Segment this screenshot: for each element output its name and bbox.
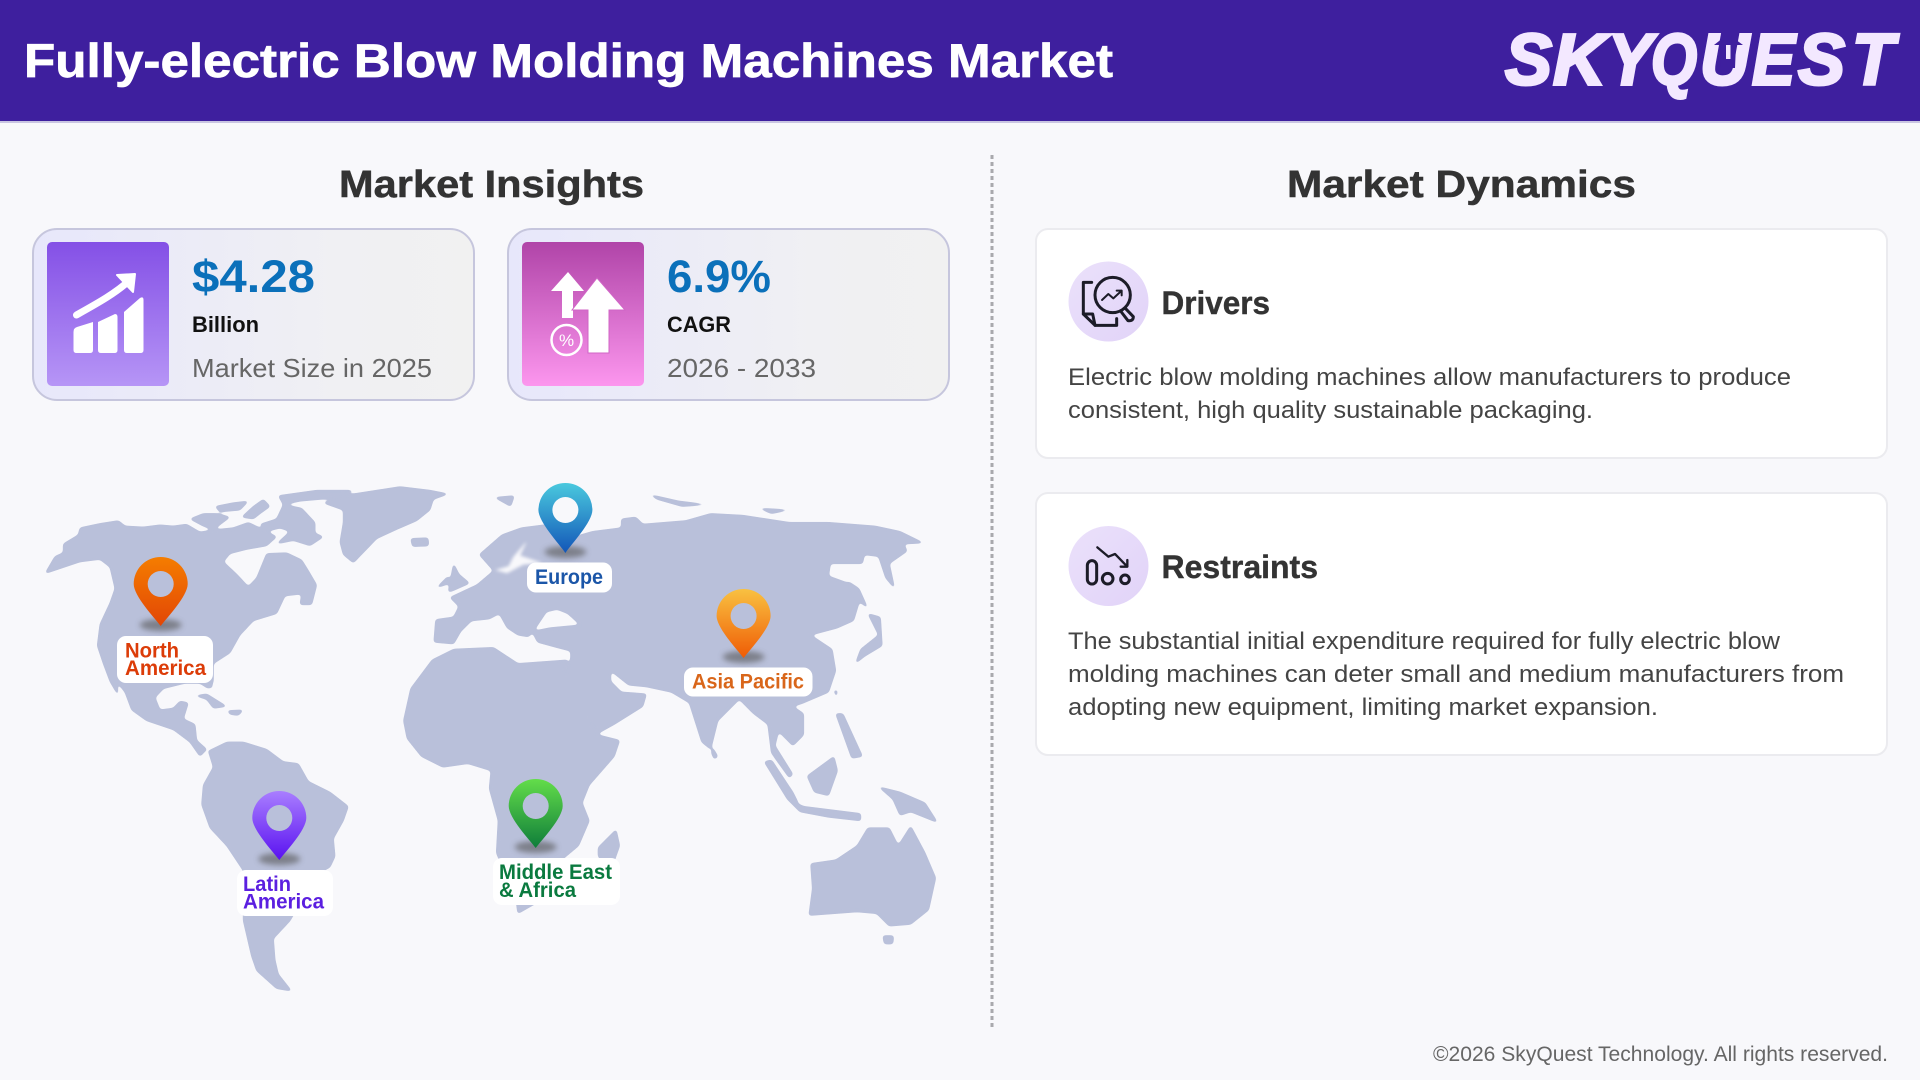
- header band: [0, 0, 1920, 123]
- text: restraints body: adopting new equipment, limiting market expansion.: [1068, 694, 1658, 721]
- value: 6.9%: [667, 251, 771, 302]
- label: Latin America: America: [243, 890, 324, 914]
- logo: SkyQuest: Y: [1608, 20, 1657, 100]
- heading: Restraints: Restraints: [1162, 549, 1318, 585]
- icon: declining trend: [1068, 526, 1148, 606]
- americas and greenland: [45, 487, 448, 991]
- footer copyright: ©2026 SkyQuest Technology. All rights reserved.: [1433, 1043, 1888, 1066]
- unit: Billion: [192, 312, 259, 337]
- icon: arrows and percent: %: [559, 331, 574, 350]
- logo: SkyQuest: T: [1852, 20, 1900, 100]
- pin: Europe: [538, 483, 592, 558]
- icon: document with magnifier: [1068, 262, 1148, 342]
- logo: SkyQuest: K: [1553, 20, 1611, 100]
- logo: SkyQuest: U: [1700, 20, 1751, 100]
- panel: restraints: [1036, 493, 1887, 755]
- text: restraints body: molding machines can deter small and medium manufacturers from: [1068, 661, 1844, 688]
- pin: Middle East & Africa: [509, 779, 563, 853]
- text: restraints body: The substantial initial expenditure required for fully electric blow: [1068, 628, 1780, 655]
- text: restraints body: [1068, 628, 1844, 721]
- panel: drivers: [1036, 229, 1887, 458]
- label: Europe: Europe: [535, 566, 603, 589]
- caption: 2026 - 2033: [667, 353, 816, 383]
- label: Middle East & Africa: & Africa: [499, 879, 576, 902]
- pin: Latin America: [252, 791, 306, 865]
- text: drivers body: Electric blow molding machines allow manufacturers to produce: [1068, 364, 1791, 391]
- pin: Asia Pacific: [717, 589, 771, 663]
- world map: [45, 487, 937, 991]
- logo: SkyQuest: S: [1505, 20, 1552, 100]
- label: Asia Pacific: Asia Pacific: [692, 670, 804, 694]
- icon: arrows and percent: [522, 242, 644, 386]
- label: North America: America: [125, 657, 206, 680]
- label: North America: [117, 636, 213, 683]
- label: North America: North: [125, 640, 179, 662]
- logo: SkyQuest: Q: [1651, 20, 1697, 100]
- text: drivers body: consistent, high quality sustainable packaging.: [1068, 397, 1593, 424]
- label: Latin America: Latin: [243, 873, 291, 896]
- logo: SkyQuest: [1505, 20, 1900, 100]
- label: Latin America: [237, 870, 333, 916]
- heading: Market Dynamics: Market Dynamics: [1287, 164, 1636, 206]
- heading: Market Insights: Market Insights: [339, 164, 644, 206]
- title: Fully-electric Blow Molding Machines Market: [24, 34, 1113, 87]
- heading: Drivers: Drivers: [1162, 285, 1270, 321]
- stat card: market size: [33, 229, 474, 400]
- label: Middle East & Africa: [493, 858, 620, 905]
- logo: SkyQuest: S: [1798, 20, 1845, 100]
- label: Europe: [527, 562, 612, 592]
- value: $4.28: [192, 251, 315, 302]
- icon: rising bar chart: [47, 242, 169, 386]
- pin: North America: [134, 557, 188, 631]
- unit: CAGR: [667, 312, 731, 337]
- eurasia, africa, oceania: [404, 495, 937, 944]
- logo: SkyQuest: E: [1752, 20, 1797, 100]
- label: Middle East & Africa: Middle East: [499, 861, 612, 884]
- text: drivers body: [1068, 364, 1791, 424]
- caption: Market Size in 2025: [192, 353, 432, 383]
- stat card: CAGR: [508, 229, 949, 400]
